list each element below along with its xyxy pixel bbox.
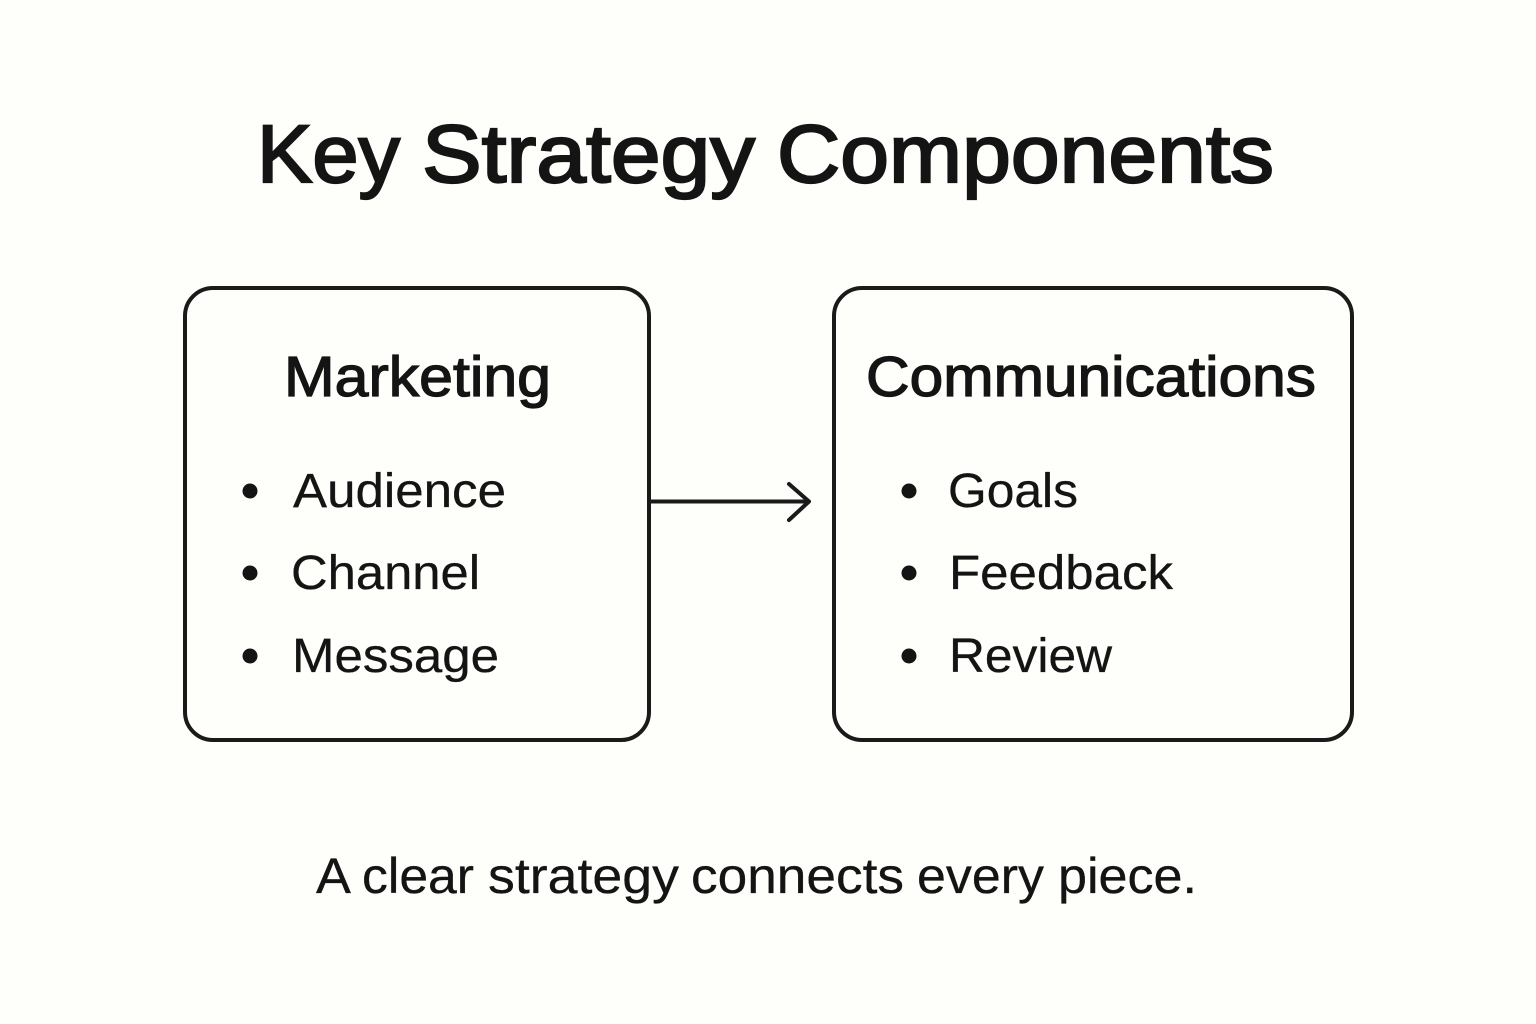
panel: Marketing — [185, 288, 649, 740]
heading: Communications: Communications — [866, 345, 1316, 409]
list item: Feedback: Feedback — [949, 547, 1174, 600]
caption: clear — [362, 848, 474, 904]
title: Key — [257, 109, 400, 200]
list item: Review: Review — [949, 630, 1112, 683]
caption: A — [316, 848, 352, 904]
caption: connects — [691, 848, 904, 904]
heading: Marketing: Marketing — [284, 345, 551, 409]
list item: Message: Message — [292, 630, 499, 683]
arrow: Marketing to Communications — [650, 484, 809, 520]
list item: Channel: Channel — [291, 547, 480, 600]
caption: piece. — [1058, 848, 1197, 904]
title: Strategy — [422, 109, 755, 200]
caption: every — [917, 848, 1044, 904]
panel outline: Marketing — [185, 288, 649, 740]
panel outline: Communications — [834, 288, 1352, 740]
list item: Goals: Goals — [948, 465, 1078, 518]
panel: Communications — [834, 288, 1352, 740]
list item: Audience: Audience — [293, 465, 506, 518]
title: Components — [777, 109, 1274, 200]
caption: strategy — [488, 848, 679, 904]
